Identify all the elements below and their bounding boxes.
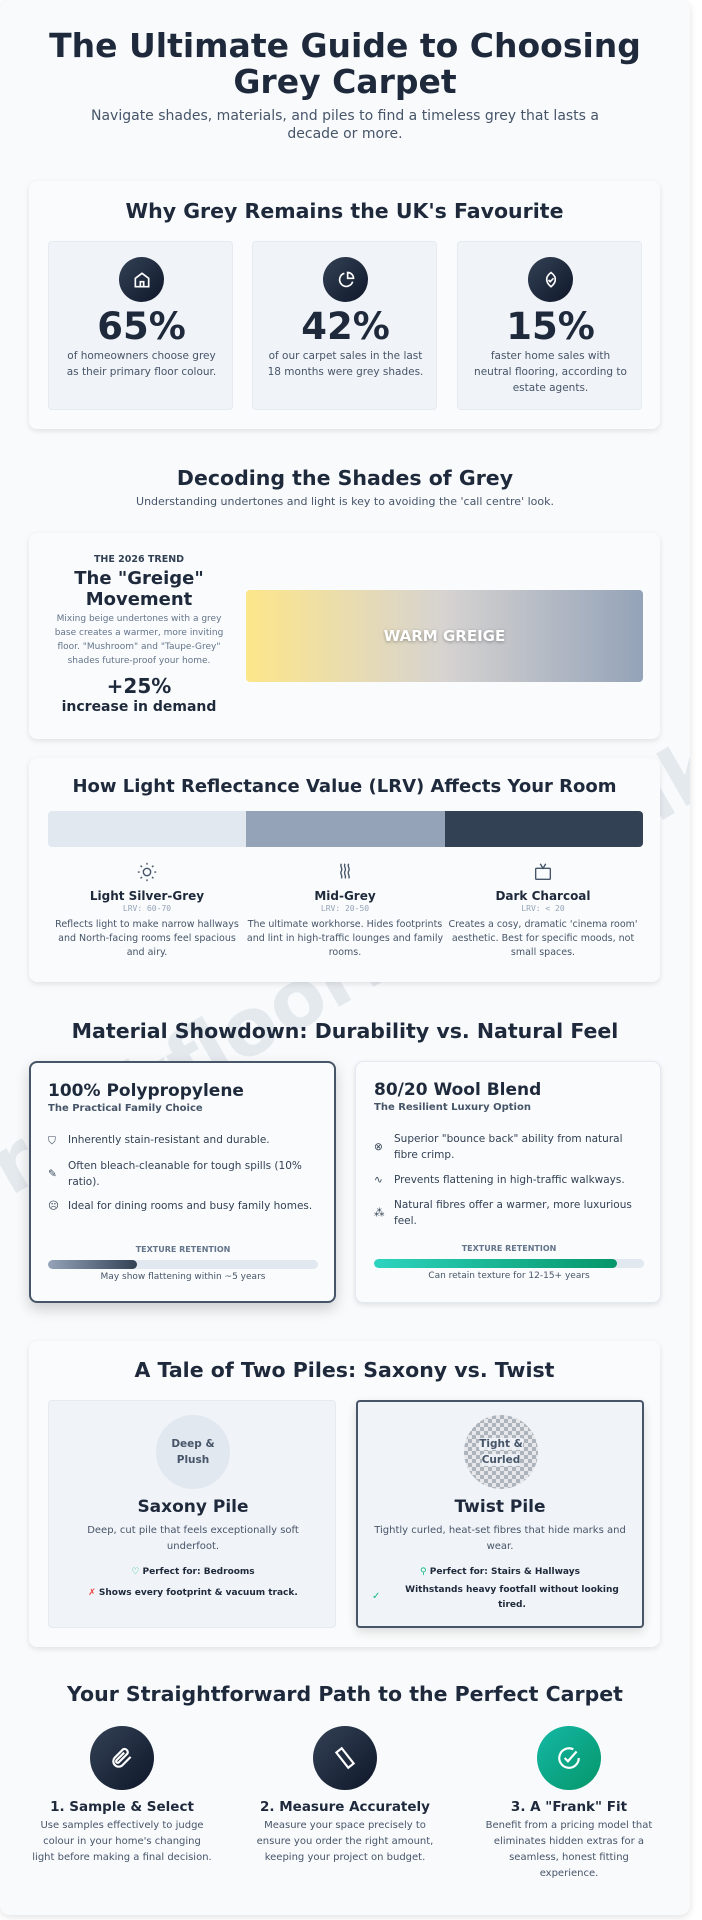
icon: deep & plush: Deep & [171,1438,215,1450]
panel: wool blend [355,1061,661,1303]
item: bleach: Often bleach-cleanable for tough spills (10% ratio). [68,1160,302,1188]
pile: saxony: Deep, cut pile that feels exceptionally soft underfoot. [87,1525,299,1552]
panel: wool blend: The Resilient Luxury Option [374,1102,531,1113]
pile: saxony: ✗ Shows every footprint & vacuum track. [88,1588,298,1598]
stat: 42%: 42% [301,305,390,348]
texture bar: wool: TEXTURE RETENTION [462,1244,556,1253]
icon: ruler [313,1726,377,1790]
LRV: mid: The ultimate workhorse. Hides footprints and lint in high-traffic lounges and family rooms. [247,919,443,958]
panel: polypropylene: ☹ [48,1200,59,1212]
swatch: warm greige: WARM GREIGE [384,627,505,645]
step 1 [32,1726,212,1863]
pile: twist: Twist Pile [454,1497,546,1517]
heading: path: Your Straightforward Path to the Perfect Carpet [67,1682,623,1706]
texture bar: wool [374,1244,644,1281]
texture bar: poly [48,1245,318,1282]
panel: polypropylene: 100% Polypropylene [48,1081,244,1101]
item: bounce: Superior "bounce back" ability from natural fibre crimp. [394,1133,622,1161]
icon: house [119,257,164,302]
pile: twist: ✓ [372,1591,380,1602]
pile: twist: Tightly curled, heat-set fibres that hide marks and wear. [374,1525,626,1552]
stat: 65% [48,241,233,410]
pile: twist: Withstands heavy footfall without looking tired. [405,1585,619,1610]
panel: greige [29,533,660,739]
texture bar: wool: Can retain texture for 12-15+ years [428,1271,590,1281]
item: ideal [48,1200,312,1212]
text: greige trend: Movement [86,589,192,610]
icon: tight & curled: Tight & [479,1438,523,1450]
item: bounce: ⊗ [374,1141,383,1153]
title: Grey Carpet [233,62,457,101]
step 3: Benefit from a pricing model that eliminates hidden extras for a seamless, honest fitting experience. [486,1820,652,1879]
LRV: dark [448,863,638,958]
step 2: 2. Measure Accurately [260,1799,430,1815]
item: bleach: ✎ [48,1168,57,1180]
texture bar: poly: May show flattening within ~5 years [101,1272,265,1282]
panel: polypropylene: Ideal for dining rooms and busy family homes. [68,1200,312,1212]
LRV: light [55,862,239,958]
text: greige trend [55,554,223,715]
panel: polypropylene: Inherently stain-resistant and durable. [68,1134,270,1146]
swatch: warm greige [246,590,643,682]
heading: material showdown: Material Showdown: Durability vs. Natural Feel [72,1019,618,1043]
title: The Ultimate Guide to Choosing [49,26,641,65]
pile: saxony [48,1400,336,1628]
icon: badge [528,257,573,302]
LRV: mid: Mid-Grey [314,889,376,903]
heading: LRV: How Light Reflectance Value (LRV) Affects Your Room [72,776,617,797]
LRV: light: Reflects light to make narrow hallways and North-facing rooms feel spacious and airy. [55,919,239,958]
item: natural: ⁂ [374,1207,384,1219]
step 1: 1. Sample & Select [50,1799,194,1815]
pile: twist [356,1400,644,1628]
LRV bar [48,811,643,847]
LRV: dark: LRV: < 20 [521,904,565,913]
stat: 65%: as their primary floor colour. [67,366,216,378]
stat: 15%: estate agents. [513,382,588,394]
LRV: light: LRV: 60-70 [123,904,171,913]
icon: tight & curled [464,1415,538,1489]
pile: saxony: ♡ Perfect for: Bedrooms [131,1567,255,1577]
LRV: dark: Creates a cosy, dramatic 'cinema room' aesthetic. Best for specific moods, not small spaces. [448,919,638,958]
LRV: dark: Dark Charcoal [495,889,591,903]
stat: 15%: 15% [506,305,595,348]
step 3 [486,1726,652,1879]
panel: piles [29,1341,660,1647]
item: flattening [374,1174,625,1186]
title [49,26,641,101]
icon: tight & curled: Curled [482,1454,520,1466]
item: stain [48,1134,270,1147]
stat: 65%: 65% [97,305,186,348]
panel: wool blend: ∿ [374,1174,383,1186]
step 2: Measure your space precisely to ensure you order the right amount, keeping your project on budget. [257,1820,433,1863]
step 1: light before making a final decision. [32,1852,212,1863]
panel: polypropylene: The Practical Family Choice [48,1103,203,1114]
text: greige trend: The "Greige" [74,568,204,589]
heading: why grey: Why Grey Remains the UK's Favourite [126,199,564,223]
subheading: Understanding undertones and light is key to avoiding the 'call centre' look. [136,495,554,508]
icon: pie chart [323,257,368,302]
panel: polypropylene: ⛉ [48,1135,56,1147]
step 2 [257,1726,433,1863]
LRV: light: Light Silver-Grey [90,889,204,903]
text: greige trend: THE 2026 TREND [94,554,184,565]
text: greige trend: increase in demand [62,699,216,715]
stat: 15%: neutral flooring, according to [474,366,627,378]
step 3: 3. A "Frank" Fit [511,1799,627,1815]
panel: polypropylene [29,1061,336,1303]
stat: 65%: of homeowners choose grey [67,350,216,362]
icon: check [537,1726,601,1790]
heading: decoding shades: Decoding the Shades of Grey [177,466,513,490]
text: greige trend: Mixing beige undertones with a grey base creates a warmer, more inviting floor. "Mushroom" and "Taupe-Grey" shades future-proof your home. [55,614,223,666]
stat: 15%: faster home sales with [491,350,610,362]
pile: saxony: Saxony Pile [137,1497,249,1517]
icon: paperclip [90,1726,154,1790]
step 1: colour in your home's changing [43,1836,201,1847]
icon: deep & plush: Plush [177,1454,209,1466]
LRV: mid [247,863,443,958]
item: natural: Natural fibres offer a warmer, more luxurious feel. [394,1199,632,1227]
texture bar: poly: TEXTURE RETENTION [136,1245,230,1254]
panel: LRV [29,758,660,982]
icon: deep & plush [156,1415,230,1489]
panel: wool blend: 80/20 Wool Blend [374,1080,541,1100]
stat: 42%: of our carpet sales in the last [269,350,422,362]
step 1: Use samples effectively to judge [40,1820,204,1831]
LRV: mid: LRV: 20-50 [321,904,369,913]
heading: piles: A Tale of Two Piles: Saxony vs. Twist [134,1358,554,1382]
stat: 42%: 18 months were grey shades. [268,366,423,378]
text: greige trend: +25% [107,674,171,698]
stat: 42% [252,241,437,410]
panel: why grey [29,181,660,429]
subtitle: Navigate shades, materials, and piles to find a timeless grey that lasts a decade or more. [91,108,599,142]
pile: twist: ⚲ Perfect for: Stairs & Hallways [420,1567,580,1577]
stat: 15% [457,241,642,410]
panel: wool blend: Prevents flattening in high-traffic walkways. [394,1174,625,1186]
